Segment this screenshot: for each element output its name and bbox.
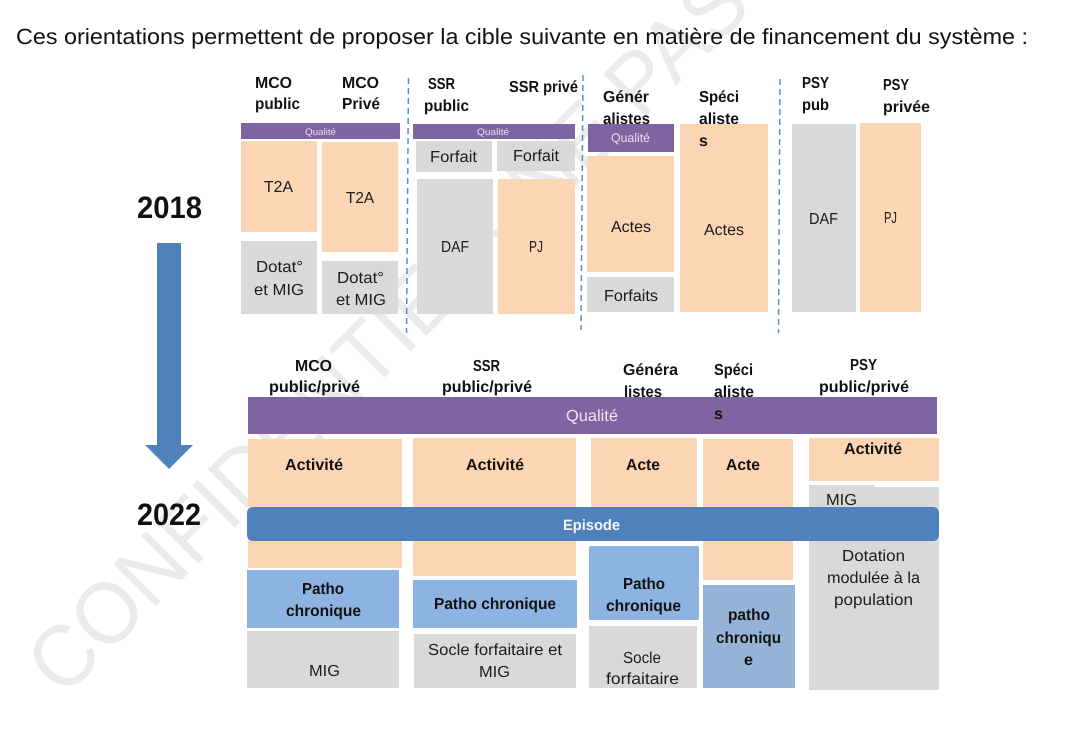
block: DAF: DAF [441, 239, 469, 256]
heading: Généralistes: listes [624, 384, 662, 401]
heading: Spécialistes 2022: s [714, 406, 723, 423]
block: Patho chronique SSR: Patho chronique [434, 596, 556, 613]
block: Forfait privé: Forfait [513, 148, 560, 165]
block: Socle forfaitaire généralistes: forfaitaire [606, 671, 679, 688]
heading: MCO Privé: Privé [342, 96, 380, 113]
heading: PSY privée: privée [883, 99, 930, 116]
column: SSR 2022 [413, 438, 577, 688]
panel: 2018 SSR [413, 76, 578, 314]
block: Actes spécialistes [680, 124, 768, 312]
column: PSY 2022 [809, 438, 939, 690]
block: DAF PSY [792, 124, 856, 312]
heading: SSR public: public [424, 98, 469, 115]
panel: 2018 Généralistes [587, 89, 674, 312]
block: Activité PSY [809, 438, 939, 481]
panel: 2022 headings [269, 357, 909, 401]
block: Dotation modulée à la population: Dotation [842, 548, 905, 565]
block: PJ PSY: PJ [884, 210, 897, 227]
panel: 2018 PSY [792, 75, 930, 312]
block: PJ: PJ [529, 239, 543, 256]
block: Dotation modulée à la population [809, 520, 939, 690]
bar: Qualité MCO: Qualité [305, 127, 336, 138]
block: Acte spécialistes [703, 439, 793, 580]
block: Actes généralistes [587, 156, 674, 272]
block: Patho chronique MCO [247, 570, 399, 628]
block: Actes spécialistes: Actes [704, 222, 744, 239]
block: MIG PSY [809, 485, 939, 520]
heading: MCO Privé: MCO [342, 75, 379, 92]
block: Socle forfaitaire généralistes [589, 626, 697, 688]
block: Dotation et MIG privé [322, 261, 398, 314]
heading: PSY pub: pub [802, 97, 829, 114]
block: Activité MCO: Activité [285, 457, 343, 474]
heading: PSY privée [883, 77, 930, 116]
block: Socle forfaitaire généralistes: Socle [623, 650, 661, 667]
bar: Qualité 2022: Qualité [566, 408, 618, 425]
block: Actes généralistes: Actes [611, 219, 651, 236]
heading: Spécialistes [699, 89, 739, 150]
heading: Spécialistes 2022 [714, 362, 754, 423]
block: Patho chronique MCO: chronique [286, 603, 361, 620]
bar: Episode [247, 507, 939, 541]
column: MCO 2022 [247, 439, 402, 688]
heading: MCO public: public [255, 96, 300, 113]
block: Activité SSR [413, 438, 576, 576]
heading: MCO public/privé: MCO [295, 358, 332, 375]
bar: Qualité MCO [241, 123, 400, 139]
heading: Spécialistes: s [699, 133, 708, 150]
heading: Spécialistes: Spéci [699, 89, 739, 106]
block: Socle forfaitaire et MIG: Socle forfaitaire et [428, 642, 563, 659]
heading: Spécialistes 2022: aliste [714, 384, 754, 401]
block: T2A privé [322, 142, 398, 252]
block: Patho chronique MCO: Patho [302, 581, 344, 598]
block: Dotation modulée à la population: population [834, 592, 913, 609]
block: T2A public: T2A [264, 179, 293, 196]
heading: MCO public [255, 75, 300, 113]
heading: Spécialistes 2022: Spéci [714, 362, 753, 379]
block: Acte spécialistes: Acte [726, 457, 760, 474]
block: Patho chronique généralistes [589, 546, 699, 620]
block: Activité MCO [248, 439, 402, 568]
panel: 2018 MCO [241, 75, 400, 314]
arrow: 2018 to 2022 [145, 243, 193, 469]
heading: PSY pub: PSY [802, 75, 829, 92]
heading: Spécialistes: aliste [699, 111, 739, 128]
title: Ces orientations permettent de proposer la cible suivante en matière de financement du système : [16, 24, 1028, 49]
block: Patho chronique généralistes: Patho [623, 576, 665, 593]
block: Forfaits: Forfaits [604, 288, 658, 305]
block: T2A public [241, 141, 317, 232]
block: Socle forfaitaire et MIG: MIG [479, 664, 510, 681]
block: T2A privé: T2A [346, 190, 374, 207]
bar: Qualité 2022 [248, 397, 937, 434]
bar: Qualité généralistes: Qualité [611, 131, 650, 145]
heading: MCO public/privé [269, 358, 360, 396]
block: Patho chronique SSR [413, 580, 577, 628]
block: patho chronique spécialistes: patho [728, 607, 770, 624]
heading: SSR public/privé: public/privé [442, 379, 532, 396]
heading: MCO Privé [342, 75, 380, 113]
block: Acte généralistes: Acte [626, 457, 660, 474]
block: Forfait privé [497, 141, 575, 171]
heading: PSY pub [802, 75, 829, 114]
heading: PSY privée: PSY [883, 77, 909, 94]
block: MIG MCO: MIG [309, 663, 340, 680]
block: Acte généralistes [591, 438, 697, 518]
block: Dotation et MIG public: Dotat° [256, 259, 303, 276]
block: DAF [417, 179, 493, 314]
heading: PSY public/privé: public/privé [819, 379, 909, 396]
heading: PSY public/privé [819, 357, 909, 396]
bar: Qualité SSR: Qualité [477, 127, 509, 138]
heading: SSR public: SSR [428, 76, 455, 93]
column: Spécialistes 2022 [703, 439, 795, 688]
heading: Généralistes [623, 362, 678, 401]
heading: SSR public/privé [442, 358, 532, 396]
panel: 2018 Spécialistes [680, 89, 768, 312]
bar: Episode: Episode [563, 517, 620, 534]
block: Dotation et MIG privé: et MIG [336, 292, 386, 309]
block: Dotation et MIG public: et MIG [254, 282, 304, 299]
block: Dotation modulée à la population: modulée à la [827, 570, 920, 587]
block: Activité SSR: Activité [466, 457, 524, 474]
heading: Généralistes: alistes [603, 111, 650, 128]
column: Généralistes 2022 [589, 438, 699, 688]
year label 2018: 2018 [137, 190, 202, 225]
heading: MCO public/privé: public/privé [269, 379, 360, 396]
block: patho chronique spécialistes [703, 585, 795, 688]
block: Socle forfaitaire et MIG [414, 634, 576, 688]
block: MIG PSY: MIG [826, 492, 857, 509]
year label 2022: 2022 [137, 497, 201, 532]
block: patho chronique spécialistes: chroniqu [716, 630, 781, 647]
block: Dotation et MIG public [241, 241, 317, 314]
block: Activité PSY: Activité [844, 441, 902, 458]
heading: Généralistes [603, 89, 650, 128]
heading: Généralistes: Génér [603, 89, 649, 106]
bar: Qualité SSR [413, 124, 575, 139]
heading: SSR public [424, 76, 469, 115]
block: DAF PSY: DAF [809, 211, 838, 228]
heading: Généralistes: Généra [623, 362, 678, 379]
block: Forfaits [587, 277, 674, 312]
block: MIG MCO [247, 631, 399, 688]
block: PJ PSY [860, 123, 921, 312]
bar: Qualité généralistes [588, 124, 674, 152]
block: Forfait public: Forfait [430, 149, 478, 166]
heading: SSR privé: SSR privé [509, 79, 578, 96]
block: Dotation et MIG privé: Dotat° [337, 270, 384, 287]
heading: MCO public: MCO [255, 75, 292, 92]
heading: SSR public/privé: SSR [473, 358, 500, 375]
block: PJ [498, 179, 575, 314]
block: Patho chronique généralistes: chronique [606, 598, 681, 615]
heading: PSY public/privé: PSY [850, 357, 877, 374]
block: patho chronique spécialistes: e [744, 652, 753, 669]
block: Forfait public [416, 141, 492, 172]
